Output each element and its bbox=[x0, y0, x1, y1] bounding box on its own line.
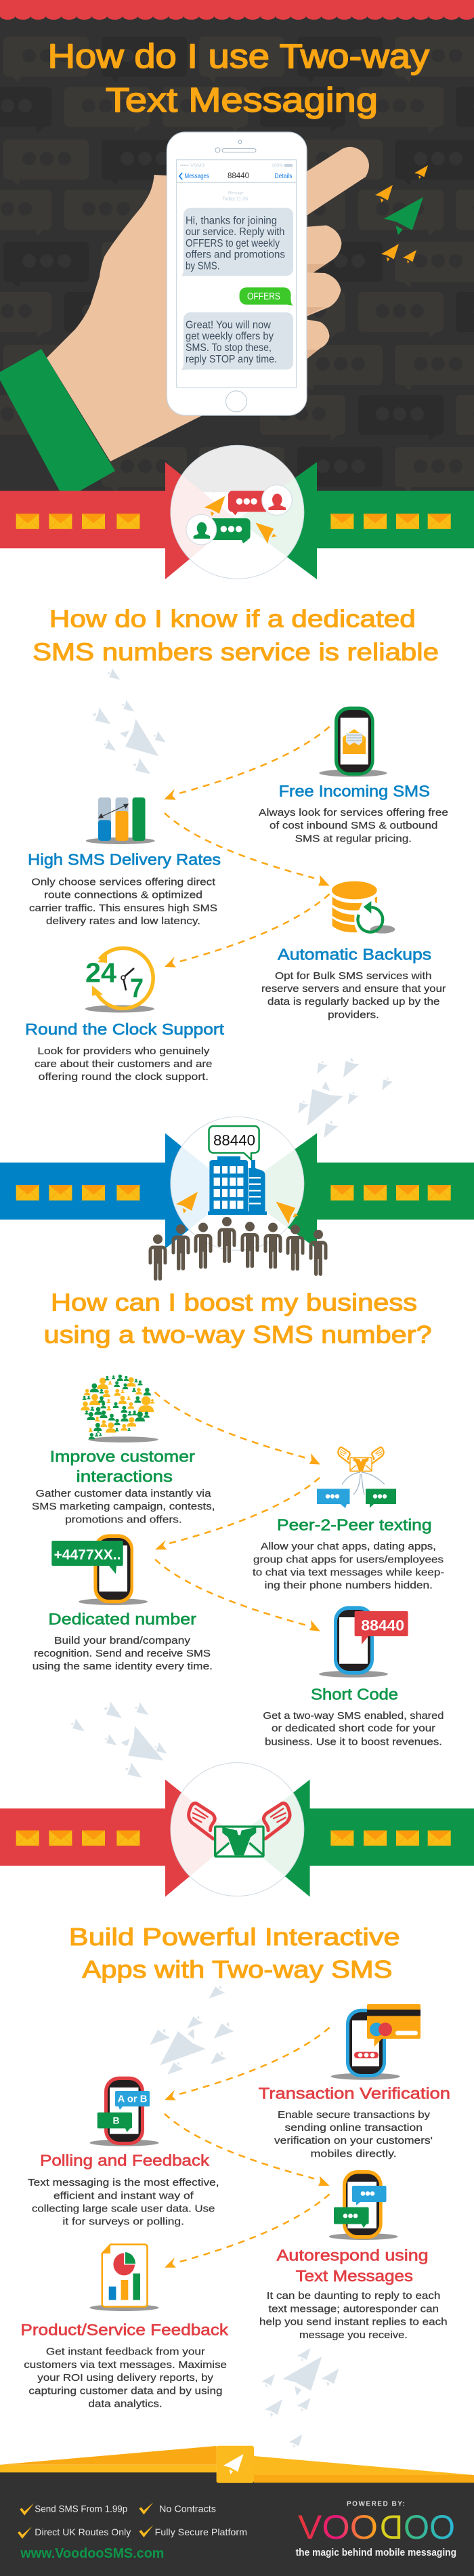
band 3: red and green arrows bbox=[0, 1763, 474, 1897]
icon: 24/7 clock: 24 bbox=[85, 957, 116, 988]
icon: paper planes flying from phone bbox=[375, 165, 428, 264]
title bbox=[47, 37, 429, 119]
title: How do I use Two-way bbox=[47, 37, 429, 75]
panel: Peer-2-Peer texting: ing their phone numbers hidden. bbox=[265, 1581, 433, 1592]
panel: Round the Clock Support: care about their customers and are bbox=[35, 1059, 212, 1070]
screen with status and navigation bars: Details bbox=[275, 173, 293, 180]
panel: High SMS Delivery Rates: delivery rates and low latency. bbox=[46, 916, 200, 927]
panel: Round the Clock Support: Round the Clock Support bbox=[25, 1020, 225, 1038]
panel: Improve customer interactions: Improve customer bbox=[50, 1447, 195, 1465]
panel: Autorespond using Text Messages bbox=[259, 2170, 448, 2341]
icon: phone with short code callout: 88440 bbox=[361, 1617, 404, 1634]
panel: Short Code: or dedicated short code for your bbox=[272, 1724, 435, 1734]
confirmation message bubble: reply STOP any time. bbox=[186, 354, 277, 365]
icon: database with restore arrow bbox=[332, 881, 395, 934]
arrows: section 1 dashed connectors bbox=[164, 726, 330, 968]
panel: Dedicated number: using the same identity every time. bbox=[33, 1661, 213, 1672]
panel: Polling and Feedback: it for surveys or polling. bbox=[62, 2217, 184, 2228]
icon: phone with number callout: +4477XX.. bbox=[54, 1547, 121, 1562]
panel: Automatic Backups: providers. bbox=[328, 1010, 379, 1020]
screen with status and navigation bars: Messages bbox=[184, 173, 209, 180]
panel: Polling and Feedback: Text messaging is the most effective, bbox=[28, 2178, 219, 2188]
panel: Polling and Feedback bbox=[28, 2077, 219, 2228]
logo: Voodoo bbox=[296, 2500, 456, 2558]
panel: Improve customer interactions bbox=[32, 1375, 215, 1526]
incoming message bubble bbox=[181, 208, 293, 276]
confirmation message bubble: get weekly offers by bbox=[186, 331, 274, 342]
icon: hands passing envelope to chat bubbles bbox=[317, 1447, 396, 1508]
arrows: section 3 dashed connectors bbox=[165, 2027, 330, 2268]
icon: bar chart bbox=[86, 797, 155, 844]
panel: Automatic Backups bbox=[261, 881, 446, 1020]
screen with status and navigation bars: Message bbox=[228, 190, 244, 195]
panel: Polling and Feedback: Polling and Feedback bbox=[40, 2152, 210, 2169]
panel: Dedicated number: Dedicated number bbox=[48, 1610, 196, 1627]
icon: white paper plane bbox=[223, 2454, 244, 2474]
panel: Transaction Verification bbox=[259, 2004, 450, 2159]
panel: Round the Clock Support: Look for providers who genuinely bbox=[37, 1046, 210, 1057]
panel: Product/Service Feedback: Product/Service Feedback bbox=[20, 2321, 229, 2339]
icon: report document with charts bbox=[89, 2245, 158, 2311]
panel: Product/Service Feedback: your ROI using delivery reports, by bbox=[37, 2373, 214, 2384]
panel: Product/Service Feedback: data analytics. bbox=[88, 2398, 163, 2409]
decorative planes group 5 bbox=[261, 2348, 339, 2448]
panel: Transaction Verification: mobiles directly. bbox=[310, 2148, 397, 2159]
panel: Free Incoming SMS: SMS at regular pricing. bbox=[295, 834, 412, 845]
confirmation message bubble bbox=[181, 312, 293, 370]
crowd of people bbox=[150, 1217, 326, 1281]
screen with status and navigation bars: ••••• VSMS bbox=[180, 163, 205, 168]
panel: High SMS Delivery Rates: Only choose services offering direct bbox=[31, 877, 215, 888]
screen with status and navigation bars: 88440 bbox=[228, 172, 249, 180]
selling points: Send SMS From 1.99p bbox=[35, 2504, 127, 2514]
logo: Voodoo: POWERED BY: bbox=[347, 2500, 405, 2508]
panel: Automatic Backups: reserve servers and ensure that your bbox=[261, 984, 446, 995]
confirmation message bubble: SMS. To stop these, bbox=[186, 342, 272, 354]
arrows: section 2 dashed connectors bbox=[155, 1392, 320, 1632]
panel: Product/Service Feedback bbox=[20, 2245, 229, 2409]
panel: Autorespond using Text Messages: Autorespond using bbox=[276, 2246, 429, 2264]
panel: dark hero background with speech bubble pattern bbox=[0, 0, 474, 493]
panel: High SMS Delivery Rates: route connections & optimized bbox=[44, 890, 202, 901]
selling points: No Contracts bbox=[159, 2504, 216, 2514]
icon: phone with chat bubbles bbox=[329, 2170, 398, 2240]
panel: Improve customer interactions: Gather customer data instantly via bbox=[36, 1489, 212, 1499]
confirmation message bubble: Great! You will now bbox=[186, 319, 272, 331]
panel: Peer-2-Peer texting: Allow your chat apps, dating apps, bbox=[261, 1541, 436, 1552]
screen with status and navigation bars: Today 11:36 bbox=[222, 196, 248, 201]
logo: Voodoo: the magic behind mobile messaging bbox=[296, 2547, 456, 2558]
panel: Autorespond using Text Messages: Text Messages bbox=[296, 2267, 413, 2285]
panel: Short Code: Get a two-way SMS enabled, shared bbox=[263, 1711, 444, 1722]
incoming message bubble: our service. Reply with bbox=[186, 226, 284, 238]
band 2: blue and green arrows bbox=[0, 1117, 474, 1250]
panel: Round the Clock Support bbox=[25, 948, 225, 1083]
icon: phone with number callout bbox=[51, 1534, 148, 1605]
panel: Short Code: Short Code bbox=[311, 1685, 398, 1703]
scalloped red top border bbox=[0, 0, 474, 20]
panel: Peer-2-Peer texting bbox=[253, 1447, 444, 1592]
icon: business building with short code and crowd bbox=[150, 1126, 326, 1281]
panel: Autorespond using Text Messages: text message; autoresponder can bbox=[268, 2304, 439, 2314]
phone mockup bbox=[167, 132, 307, 415]
icon: phone with payment card bbox=[331, 2004, 421, 2080]
incoming message bubble: Hi, thanks for joining bbox=[186, 215, 277, 226]
panel: Automatic Backups: Automatic Backups bbox=[278, 946, 431, 963]
heading: interactive apps: Build Powerful Interactive bbox=[69, 1923, 400, 1951]
callout: 88440 bbox=[209, 1126, 259, 1160]
panel: Peer-2-Peer texting: Peer-2-Peer texting bbox=[277, 1516, 432, 1534]
icon: hand and sleeve holding phone bbox=[0, 147, 369, 491]
decorative planes group 3 bbox=[70, 1701, 167, 1779]
decorative planes group 4 bbox=[150, 1984, 236, 2077]
footer panel bbox=[0, 2446, 474, 2576]
callout: 88440: 88440 bbox=[213, 1131, 255, 1148]
title: Text Messaging bbox=[106, 81, 378, 119]
decorative planes group 1 bbox=[91, 667, 166, 776]
panel: Free Incoming SMS: Free Incoming SMS bbox=[279, 782, 430, 799]
panel: High SMS Delivery Rates: carrier traffic. This ensures high SMS bbox=[29, 903, 217, 914]
panel: Polling and Feedback: efficient and instant way of bbox=[53, 2190, 194, 2201]
logo: Voodoo: D bbox=[380, 2508, 403, 2546]
panel: Transaction Verification: sending online transaction bbox=[284, 2123, 423, 2134]
selling points: Direct UK Routes Only bbox=[35, 2527, 131, 2537]
heading: interactive apps bbox=[69, 1923, 400, 1983]
reply bubble: OFFERS: OFFERS bbox=[247, 291, 280, 302]
incoming message bubble: by SMS. bbox=[186, 260, 219, 272]
selling points bbox=[18, 2502, 247, 2539]
icon: phone with poll bubbles: A or B bbox=[118, 2094, 148, 2105]
icon: 24/7 clock: 7 bbox=[130, 974, 144, 1003]
panel: Improve customer interactions: promotions and offers. bbox=[65, 1515, 182, 1526]
panel: Autorespond using Text Messages: message you receive. bbox=[299, 2330, 408, 2341]
panel: Dedicated number: Build your brand/company bbox=[54, 1636, 191, 1646]
panel: Improve customer interactions: interactions bbox=[76, 1468, 173, 1485]
incoming message bubble: offers and promotions bbox=[186, 249, 285, 261]
panel: Peer-2-Peer texting: group chat apps for users/employees bbox=[253, 1554, 444, 1565]
panel: High SMS Delivery Rates bbox=[28, 797, 221, 927]
panel: Transaction Verification: Transaction Verification bbox=[259, 2084, 450, 2102]
icon: speech bubble made of people bbox=[81, 1375, 158, 1442]
heading: boost business bbox=[44, 1288, 431, 1348]
panel: Free Incoming SMS bbox=[259, 707, 448, 845]
icon: phone with poll bubbles: B bbox=[112, 2115, 120, 2126]
heading: reliability: How do I know if a dedicated bbox=[49, 605, 416, 633]
icon: 24/7 clock bbox=[85, 948, 154, 1012]
screen with status and navigation bars: 100% bbox=[272, 163, 283, 168]
icon: phone with short code callout bbox=[319, 1606, 408, 1678]
selling points: Fully Secure Platform bbox=[155, 2527, 247, 2537]
band 1: red and green arrows bbox=[0, 445, 474, 579]
logo: Voodoo: VOO bbox=[298, 2508, 378, 2546]
icon: hands exchanging envelope bbox=[189, 1803, 290, 1856]
panel: Dedicated number: recognition. Send and receive SMS bbox=[34, 1648, 211, 1659]
icon: phone with envelope bbox=[319, 707, 387, 776]
panel: Transaction Verification: verification on your customers' bbox=[274, 2136, 433, 2146]
panel: Product/Service Feedback: capturing customer data and by using bbox=[28, 2386, 223, 2396]
panel: Dedicated number bbox=[33, 1534, 213, 1672]
panel: Free Incoming SMS: of cost inbound SMS & outbound bbox=[270, 820, 437, 831]
panel: Peer-2-Peer texting: to chat via text messages while keep- bbox=[253, 1568, 444, 1579]
panel: Round the Clock Support: offering round the clock support. bbox=[39, 1072, 209, 1083]
panel: Improve customer interactions: SMS marketing campaign, contests, bbox=[32, 1501, 215, 1512]
screen with status and navigation bars bbox=[177, 140, 297, 388]
panel: Polling and Feedback: collecting large scale user data. Use bbox=[32, 2203, 215, 2214]
panel: Short Code: business. Use it to boost revenues. bbox=[265, 1737, 442, 1748]
icon: phone with poll bubbles bbox=[89, 2077, 158, 2146]
heading: reliability: SMS numbers service is reliable bbox=[33, 638, 439, 666]
icon: two-way chat between two users bbox=[186, 485, 292, 545]
decorative planes group 2 bbox=[296, 1056, 394, 1138]
incoming message bubble: OFFERS to get weekly bbox=[186, 238, 280, 249]
panel: Product/Service Feedback: Get instant feedback from your bbox=[46, 2347, 205, 2358]
panel: Short Code bbox=[263, 1606, 444, 1748]
panel: High SMS Delivery Rates: High SMS Delivery Rates bbox=[28, 851, 221, 869]
panel: Automatic Backups: data is regularly backed up by the bbox=[267, 997, 440, 1007]
panel: Automatic Backups: Opt for Bulk SMS services with bbox=[275, 971, 432, 982]
reply bubble: OFFERS bbox=[240, 287, 293, 306]
panel: Autorespond using Text Messages: It can be daunting to reply to each bbox=[267, 2291, 440, 2302]
footer panel: www.VoodooSMS.com bbox=[20, 2546, 164, 2561]
logo: Voodoo: OO bbox=[404, 2508, 455, 2546]
panel: Free Incoming SMS: Always look for services offering free bbox=[259, 808, 448, 818]
panel: Autorespond using Text Messages: help you send instant replies to each bbox=[259, 2317, 448, 2328]
panel: Transaction Verification: Enable secure transactions by bbox=[278, 2110, 431, 2121]
heading: boost business: using a two-way SMS number? bbox=[44, 1321, 431, 1348]
heading: interactive apps: Apps with Two-way SMS bbox=[82, 1955, 392, 1983]
heading: boost business: How can I boost my business bbox=[51, 1288, 417, 1316]
heading: reliability bbox=[33, 605, 439, 666]
panel: Product/Service Feedback: customers via text messages. Maximise bbox=[24, 2360, 227, 2371]
